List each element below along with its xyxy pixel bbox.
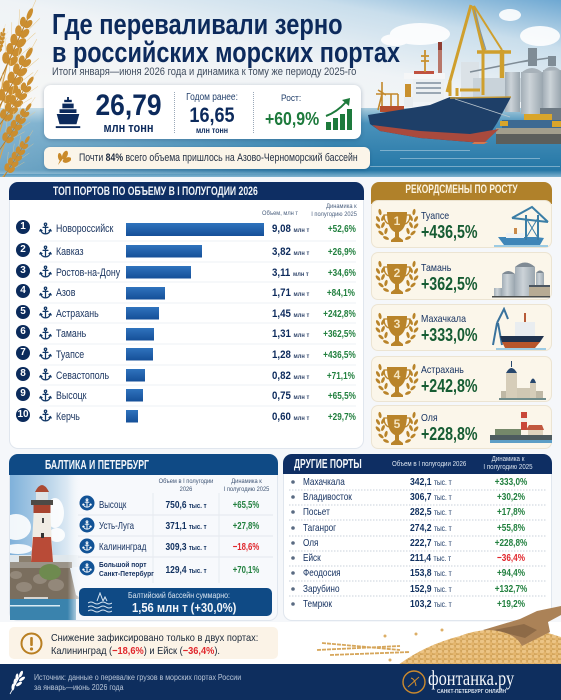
heading: other ports [283, 454, 552, 474]
row: Азов: 1,71 млн т [272, 287, 309, 299]
row: Кавказ: 2 [20, 244, 26, 255]
row: Тамань: 6 [20, 326, 26, 337]
table: other ports: Владивосток [303, 491, 352, 503]
footer [0, 664, 561, 700]
column captions: Объем, млн т [262, 210, 298, 217]
row: Новороссийск: 9,08 млн т [272, 223, 309, 235]
previous year: млн тонн [196, 126, 228, 135]
rows: Baltic table: 371,1 тыс. т [165, 520, 207, 532]
card: Оля: +228,8% [421, 424, 478, 444]
callout: decline [9, 627, 278, 659]
table: other ports: 211,4 тыс. т [410, 552, 451, 564]
table: other ports: Таганрог [303, 522, 336, 534]
panel: Baltic [9, 454, 278, 621]
heading: other ports: Динамика к [492, 456, 524, 463]
table: other ports: +30,2% [497, 491, 525, 503]
icon: warning [20, 632, 42, 654]
stats panel [44, 85, 361, 139]
row: Астрахань: +242,8% [323, 308, 356, 320]
row: Высоцк [16, 387, 356, 402]
growth: +60,9% [265, 109, 319, 129]
logo [402, 666, 514, 695]
source: Источник: данные о перевалке грузов в морских портах России [34, 673, 241, 682]
source: за январь—июнь 2026 года [34, 683, 124, 692]
row: Севастополь [16, 367, 355, 382]
row: Азов: Азов [56, 287, 75, 299]
callout: Baltic total [79, 588, 272, 616]
table: other ports: 274,2 тыс. т [410, 522, 452, 534]
row: Кавказ: +26,9% [328, 246, 356, 258]
column captions: Baltic: 2026 [180, 486, 192, 493]
table: other ports: Феодосия [303, 567, 341, 579]
heading: top ports [9, 182, 364, 200]
title: Где переваливали зерно [52, 9, 343, 41]
table: other ports [289, 476, 546, 610]
table: other ports: Темрюк [303, 598, 332, 610]
row: Керчь: +29,7% [328, 411, 356, 423]
card: Махачкала [371, 304, 552, 351]
table: other ports: +19,2% [497, 598, 525, 610]
table: other ports: 282,5 тыс. т [410, 506, 452, 518]
growth [253, 92, 353, 133]
table: other ports: Зарубино [303, 583, 340, 595]
row: Кавказ: 3,82 млн т [272, 246, 309, 258]
row: Астрахань: Астрахань [56, 308, 99, 320]
row: Новороссийск: 1 [20, 221, 26, 232]
row: Высоцк: Высоцк [56, 390, 86, 402]
callout: basin share: Почти 84% всего объема пришлось на Азово-Черноморский бассейн [79, 152, 358, 164]
column captions: Динамика к [327, 203, 357, 210]
row: Туапсе: 1,28 млн т [272, 349, 309, 361]
row: Кавказ: Кавказ [56, 246, 84, 258]
row: Новороссийск: Новороссийск [56, 223, 113, 235]
table: other ports: 152,9 тыс. т [410, 583, 452, 595]
row: Керчь: 0,60 млн т [272, 411, 309, 423]
table: other ports: +228,8% [495, 537, 527, 549]
rows: Baltic table: Высоцк [99, 499, 126, 511]
wheat ears [0, 0, 49, 200]
row: Ростов-на-Дону: Ростов-на-Дону [56, 267, 120, 279]
column captions: Baltic: Объем в I полугодии [159, 478, 213, 485]
heading: Baltic [9, 454, 278, 475]
table: other ports: +94,4% [497, 567, 525, 579]
row: Астрахань: 5 [20, 306, 26, 317]
background strip behind bottom [0, 622, 561, 665]
previous year [174, 92, 244, 133]
row: Ростов-на-Дону [16, 264, 356, 279]
card: Оля: Оля [421, 412, 438, 424]
growth: Рост: [281, 93, 301, 104]
column captions: Baltic: Динамика к [231, 478, 262, 485]
title [52, 9, 400, 68]
table: other ports: +55,8% [497, 522, 525, 534]
table: other ports: 222,7 тыс. т [410, 537, 452, 549]
table: other ports: Ейск [303, 552, 321, 564]
card: Махачкала: Махачкала [421, 313, 466, 325]
table: other ports: +132,7% [495, 583, 527, 595]
heading: growth leaders: РЕКОРДСМЕНЫ ПО РОСТУ [405, 184, 518, 196]
card: Туапсе: 1 [394, 214, 401, 228]
card: Туапсе [371, 200, 552, 248]
rows: Baltic table: +70,1% [233, 564, 259, 576]
table: other ports: 306,7 тыс. т [410, 491, 452, 503]
icon: crane and cargo ship [492, 307, 546, 350]
previous year: Годом ранее: [186, 92, 238, 103]
rows: Baltic table: −18,6% [233, 541, 259, 553]
table: other ports: −36,4% [497, 552, 525, 564]
heading: other ports: Объем в I полугодии 2026 [392, 461, 466, 468]
column captions [262, 203, 357, 218]
table: other ports: 103,2 тыс. т [410, 598, 452, 610]
row: Азов [16, 284, 355, 299]
icon: growth chart [326, 98, 352, 130]
row: Керчь: 10 [17, 409, 29, 420]
icon: lighthouse island [490, 412, 552, 443]
callout: decline: Калининград (−18,6%) и Ейск (−36,4%). [51, 645, 220, 657]
icon: wheat [10, 670, 25, 694]
row: Астрахань: 1,45 млн т [272, 308, 309, 320]
total volume: млн тонн [103, 121, 154, 135]
row: Севастополь: Севастополь [56, 370, 109, 382]
panel: top ports by volume [9, 182, 364, 449]
icon: ship [56, 97, 80, 128]
table: other ports: 153,8 тыс. т [410, 567, 452, 579]
total volume: 26,79 [96, 89, 162, 122]
row: Тамань [16, 325, 356, 340]
table: other ports: +333,0% [495, 476, 527, 488]
card: Астрахань: +242,8% [421, 376, 478, 396]
table: other ports: Махачкала [303, 476, 345, 488]
card: Туапсе: Туапсе [421, 210, 449, 222]
rows: Baltic table: 309,3 тыс. т [165, 541, 207, 553]
title: в российских морских портах [52, 36, 400, 68]
heading: top ports: ТОП ПОРТОВ ПО ОБЪЕМУ В I ПОЛУГОДИИ 2026 [53, 184, 258, 198]
card: Махачкала: 3 [394, 317, 401, 331]
rows: Baltic table: Калининград [99, 541, 146, 553]
row: Севастополь: 8 [20, 368, 26, 379]
table: other ports: Посьет [303, 506, 330, 518]
subtitle: Итоги января—июня 2026 года и динамика к тому же периоду 2025-го [52, 66, 356, 78]
card: Махачкала: +333,0% [421, 325, 478, 345]
row: Новороссийск: +52,6% [328, 223, 356, 235]
source [34, 673, 241, 692]
card: Оля: 5 [394, 417, 401, 431]
card: Тамань: +362,5% [421, 274, 478, 294]
table: other ports: +17,8% [497, 506, 525, 518]
rows: Baltic table: Усть-Луга [99, 520, 134, 532]
rows: Baltic table: +65,5% [233, 499, 259, 511]
rows: Baltic table: +27,8% [233, 520, 259, 532]
card: Астрахань: Астрахань [421, 364, 464, 376]
card: Оля [371, 405, 552, 449]
card: Астрахань: 4 [394, 368, 401, 382]
column captions: Baltic: I полугодию 2025 [224, 486, 269, 493]
row: Ростов-на-Дону: +34,6% [328, 267, 356, 279]
row: Керчь: Керчь [56, 411, 80, 423]
row: Высоцк: +65,5% [328, 390, 356, 402]
callout: Baltic total: Балтийский бассейн суммарно: [128, 590, 230, 600]
logo: фонтанка.ру [428, 666, 514, 690]
icon: grain silos [492, 262, 550, 298]
row: Керчь [16, 408, 356, 423]
photo: grain pile and wooden scoop [317, 606, 561, 664]
table: other ports: Оля [303, 537, 319, 549]
card: Туапсе: +436,5% [421, 222, 478, 242]
icon: wheat leaf [58, 150, 71, 165]
heading: other ports: ДРУГИЕ ПОРТЫ [294, 457, 362, 471]
row: Туапсе: +436,5% [323, 349, 356, 361]
column captions: Baltic [158, 478, 270, 493]
row: Астрахань [16, 305, 356, 320]
row: Новороссийск [16, 220, 356, 235]
panel: other ports [283, 454, 552, 621]
hero photo: port, ship, cranes, silos and wheat [0, 0, 561, 177]
rows: Baltic table: Большой порт [99, 560, 146, 569]
row: Тамань: Тамань [56, 328, 86, 340]
row: Туапсе [16, 346, 356, 361]
rows: Baltic table: Санкт-Петербург [99, 569, 154, 578]
heading: growth leaders [371, 182, 552, 204]
row: Высоцк: 9 [20, 388, 26, 399]
card: Астрахань [371, 356, 552, 402]
card: Тамань: Тамань [421, 262, 451, 274]
heading: Baltic: БАЛТИКА И ПЕТЕРБУРГ [45, 457, 149, 472]
row: Ростов-на-Дону: 3 [20, 265, 26, 276]
icon: waves [88, 592, 112, 612]
bar chart: ports [39, 222, 356, 422]
callout: decline: Снижение зафиксировано только в двух портах: [51, 632, 258, 644]
photo: lighthouse [10, 475, 79, 620]
rows: Baltic table: 750,6 тыс. т [165, 499, 207, 511]
column captions: I полугодию 2025 [311, 211, 357, 218]
card: Тамань [371, 252, 552, 300]
row: Севастополь: 0,82 млн т [272, 370, 309, 382]
row: Туапсе: 7 [20, 347, 26, 358]
row: Ростов-на-Дону: 3,11 млн т [272, 267, 309, 279]
callout: basin share [44, 147, 370, 169]
row: Туапсе: Туапсе [56, 349, 84, 361]
row: Севастополь: +71,1% [327, 370, 355, 382]
icon: kremlin towers [499, 361, 546, 400]
row: Кавказ [16, 243, 356, 258]
row: Азов: 4 [20, 285, 26, 296]
previous year: 16,65 [189, 104, 235, 127]
row: Тамань: +362,5% [323, 328, 356, 340]
card: Тамань: 2 [394, 266, 401, 280]
row: Тамань: 1,31 млн т [272, 328, 309, 340]
icon: port crane and ship [494, 206, 549, 247]
row: Высоцк: 0,75 млн т [272, 390, 309, 402]
heading: other ports: I полугодию 2025 [483, 464, 533, 471]
rows: Baltic table: 129,4 тыс. т [165, 564, 207, 576]
table: other ports: 342,1 тыс. т [410, 476, 452, 488]
logo: САНКТ-ПЕТЕРБУРГ ОНЛАЙН [437, 689, 506, 695]
row: Азов: +84,1% [327, 287, 355, 299]
rows: Baltic table [78, 493, 273, 583]
callout: Baltic total: 1,56 млн т (+30,0%) [132, 600, 236, 615]
